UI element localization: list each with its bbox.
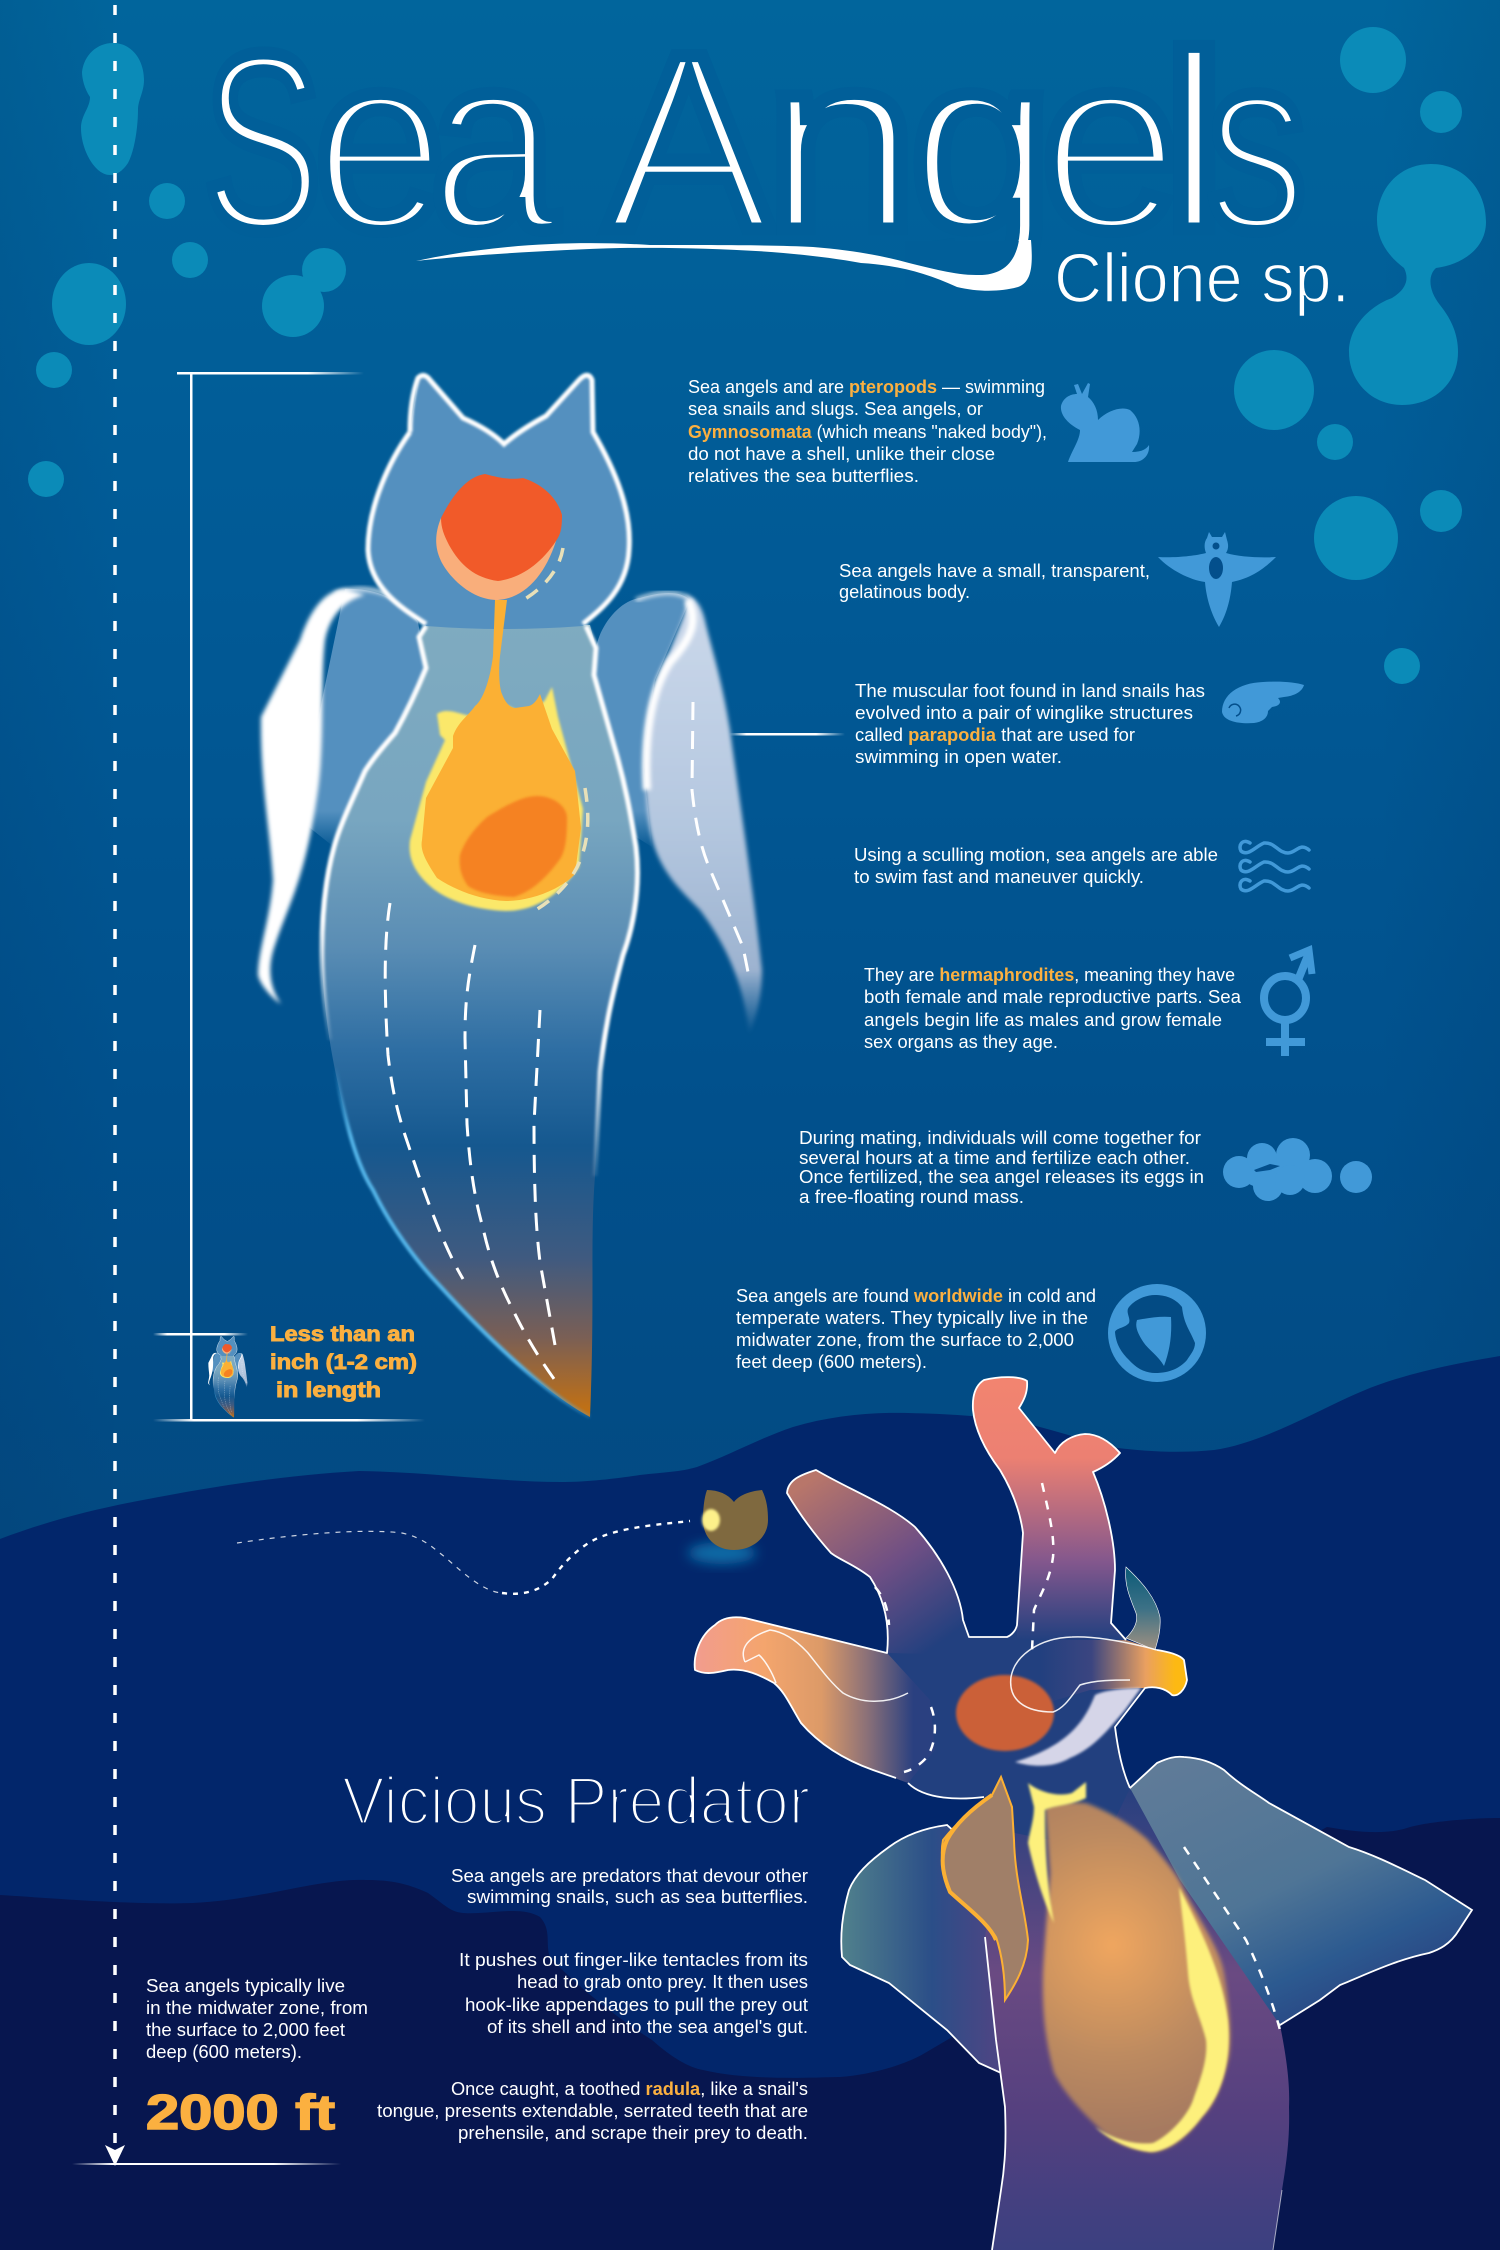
fact: worldwide: Sea angels are found worldwide in cold and bbox=[736, 1286, 1096, 1306]
predator paragraph 1 bbox=[451, 1866, 808, 1907]
fact: pteropods: Gymnosomata (which means "naked body"), bbox=[688, 422, 1047, 442]
size label: inch (1-2 cm) bbox=[270, 1351, 417, 1374]
depth paragraph: deep (600 meters). bbox=[146, 2042, 302, 2062]
subtitle: Clione sp.: Clione sp. bbox=[1054, 239, 1350, 317]
predator paragraph 1: Sea angels are predators that devour other bbox=[451, 1866, 808, 1886]
fact: parapodia: swimming in open water. bbox=[855, 747, 1062, 767]
predator mouth bbox=[956, 1675, 1054, 1751]
predator paragraph 2: head to grab onto prey. It then uses bbox=[517, 1972, 808, 1992]
fact: parapodia bbox=[855, 681, 1205, 767]
fact: parapodia: evolved into a pair of winglike structures bbox=[855, 703, 1193, 723]
icon: water waves bbox=[1240, 841, 1309, 891]
title: Sea Angels: e bbox=[314, 2, 446, 283]
fact: pteropods: relatives the sea butterflies. bbox=[688, 466, 919, 486]
title: Sea Angels: n bbox=[764, 2, 918, 283]
fact: parapodia: called parapodia that are used for bbox=[855, 725, 1135, 745]
prey: sea butterfly bbox=[688, 1490, 768, 1564]
predator paragraph 3 bbox=[377, 2079, 808, 2143]
predator right wing bbox=[1130, 1757, 1472, 2025]
size label bbox=[270, 1323, 417, 1402]
predator paragraph 2: of its shell and into the sea angel's gut. bbox=[487, 2017, 808, 2037]
fact: hermaphrodites: angels begin life as males and grow female bbox=[864, 1010, 1222, 1030]
predator body bbox=[985, 1783, 1289, 2250]
title: Sea Angels: S bbox=[204, 2, 322, 283]
title: Sea Angels: s bbox=[1208, 2, 1306, 283]
icon: sea angel silhouette bbox=[1158, 532, 1276, 627]
predator gut rim bbox=[1028, 1782, 1229, 2152]
predator paragraph 2: hook-like appendages to pull the prey out bbox=[465, 1995, 808, 2015]
fact: pteropods bbox=[688, 377, 1047, 486]
predator paragraph 3: tongue, presents extendable, serrated teeth that are bbox=[377, 2101, 808, 2121]
title swoosh bbox=[416, 240, 1032, 291]
icon: egg mass bbox=[1223, 1138, 1372, 1201]
fact: hermaphrodites: They are hermaphrodites, meaning they have bbox=[864, 965, 1235, 985]
predator gut bbox=[1043, 1802, 1230, 2152]
fact: body: gelatinous body. bbox=[839, 582, 970, 602]
icon: wing bbox=[1222, 682, 1304, 723]
fact: sculling bbox=[854, 845, 1218, 887]
predator dashed lines bbox=[875, 1483, 1280, 2030]
title: Sea Angels: l bbox=[1160, 2, 1228, 283]
predator paragraph 3: Once caught, a toothed radula, like a snail's bbox=[451, 2079, 808, 2099]
depth figure: 2000 ft bbox=[146, 2086, 335, 2140]
fact: worldwide: temperate waters. They typically live in the bbox=[736, 1308, 1088, 1328]
depth dotted line bbox=[72, 5, 341, 2166]
predator head and tentacles bbox=[695, 1377, 1187, 1850]
predator paragraph 3: prehensile, and scrape their prey to death. bbox=[458, 2123, 808, 2143]
depth paragraph: the surface to 2,000 feet bbox=[146, 2020, 345, 2040]
predator paragraph 2 bbox=[459, 1950, 808, 2037]
fact: body: Sea angels have a small, transparent, bbox=[839, 561, 1150, 581]
icon: male and female symbol bbox=[1264, 950, 1312, 1056]
predator outline bbox=[695, 1377, 1187, 1799]
depth paragraph: Sea angels typically live bbox=[146, 1976, 345, 1996]
fact: sculling: to swim fast and maneuver quickly. bbox=[854, 867, 1144, 887]
title: Sea Angels: a bbox=[430, 2, 558, 283]
fact: hermaphrodites: sex organs as they age. bbox=[864, 1032, 1058, 1052]
fact: parapodia: The muscular foot found in land snails has bbox=[855, 681, 1205, 701]
predator crescent bbox=[1015, 1688, 1141, 1766]
fact: pteropods: do not have a shell, unlike their close bbox=[688, 444, 995, 464]
fact: mating: During mating, individuals will come together for bbox=[799, 1128, 1201, 1148]
predator face lines bbox=[743, 1630, 1157, 1712]
fact: mating: several hours at a time and fertilize each other. bbox=[799, 1148, 1190, 1168]
heading: Vicious Predator: Vicious Predator bbox=[342, 1763, 810, 1839]
predator sea angel bbox=[695, 1377, 1472, 2250]
prey: sea butterfly trail bbox=[237, 1521, 690, 1594]
size label: in length bbox=[276, 1379, 381, 1402]
fact: hermaphrodites bbox=[864, 965, 1242, 1052]
fact: mating: a free-floating round mass. bbox=[799, 1187, 1024, 1207]
fact: worldwide: feet deep (600 meters). bbox=[736, 1352, 927, 1372]
deep wave bbox=[0, 1818, 1500, 2250]
title descender mask bbox=[905, 241, 1019, 301]
size scale bbox=[153, 372, 425, 1422]
icon: snail bbox=[1061, 383, 1149, 462]
fact: pteropods: sea snails and slugs. Sea angels, or bbox=[688, 399, 983, 419]
mid-depth wave bbox=[0, 1356, 1500, 2250]
fact: worldwide: midwater zone, from the surface to 2,000 bbox=[736, 1330, 1074, 1350]
size label: Less than an bbox=[270, 1323, 415, 1346]
predator horn bbox=[1126, 1567, 1160, 1650]
title: Sea Angels: g bbox=[910, 2, 1054, 283]
fact: worldwide bbox=[736, 1286, 1096, 1372]
fact: mating: Once fertilized, the sea angel releases its eggs in bbox=[799, 1167, 1204, 1187]
bubbles bbox=[28, 27, 1486, 684]
icon: globe bbox=[1108, 1284, 1206, 1382]
title: Sea Angels: e bbox=[1040, 2, 1180, 283]
predator paragraph 2: It pushes out finger-like tentacles from its bbox=[459, 1950, 808, 1970]
fact: pteropods: Sea angels and are pteropods — swimming bbox=[688, 377, 1045, 397]
predator paragraph 1: swimming snails, such as sea butterflies. bbox=[467, 1887, 808, 1907]
mini sea angel scale figure bbox=[208, 1336, 247, 1418]
sea angel main illustration bbox=[258, 375, 762, 1417]
depth paragraph bbox=[146, 1976, 368, 2062]
fact: sculling: Using a sculling motion, sea angels are able bbox=[854, 845, 1218, 865]
fact: mating bbox=[799, 1128, 1204, 1207]
fact: body bbox=[839, 561, 1150, 602]
title: Sea Angels: A bbox=[606, 2, 772, 283]
predator left wing bbox=[841, 1825, 1030, 2073]
fact: hermaphrodites: both female and male reproductive parts. Sea bbox=[864, 987, 1242, 1007]
depth paragraph: in the midwater zone, from bbox=[146, 1998, 368, 2018]
predator fin bbox=[942, 1777, 1028, 2000]
callout line to parapodia bbox=[729, 733, 845, 736]
